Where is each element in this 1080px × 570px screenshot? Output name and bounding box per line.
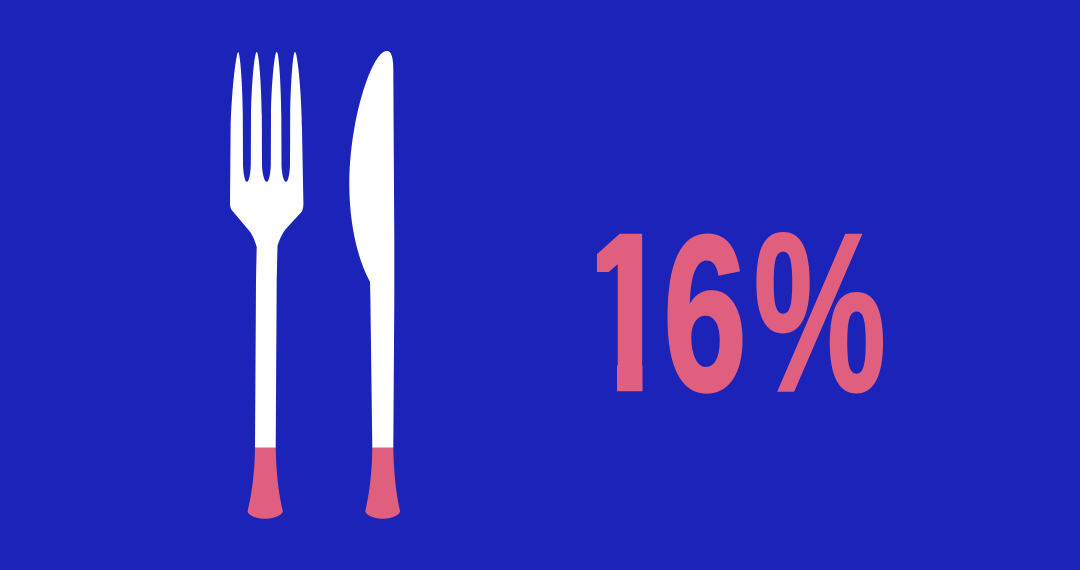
statistic: 16%: 6 [663,190,747,438]
infographic canvas [230,51,883,519]
icon: fork [230,52,303,519]
statistic: 16% [597,232,883,394]
statistic: 16%: % [754,186,886,439]
statistic: 16%: 1 [581,187,671,438]
icon: knife [349,51,400,519]
